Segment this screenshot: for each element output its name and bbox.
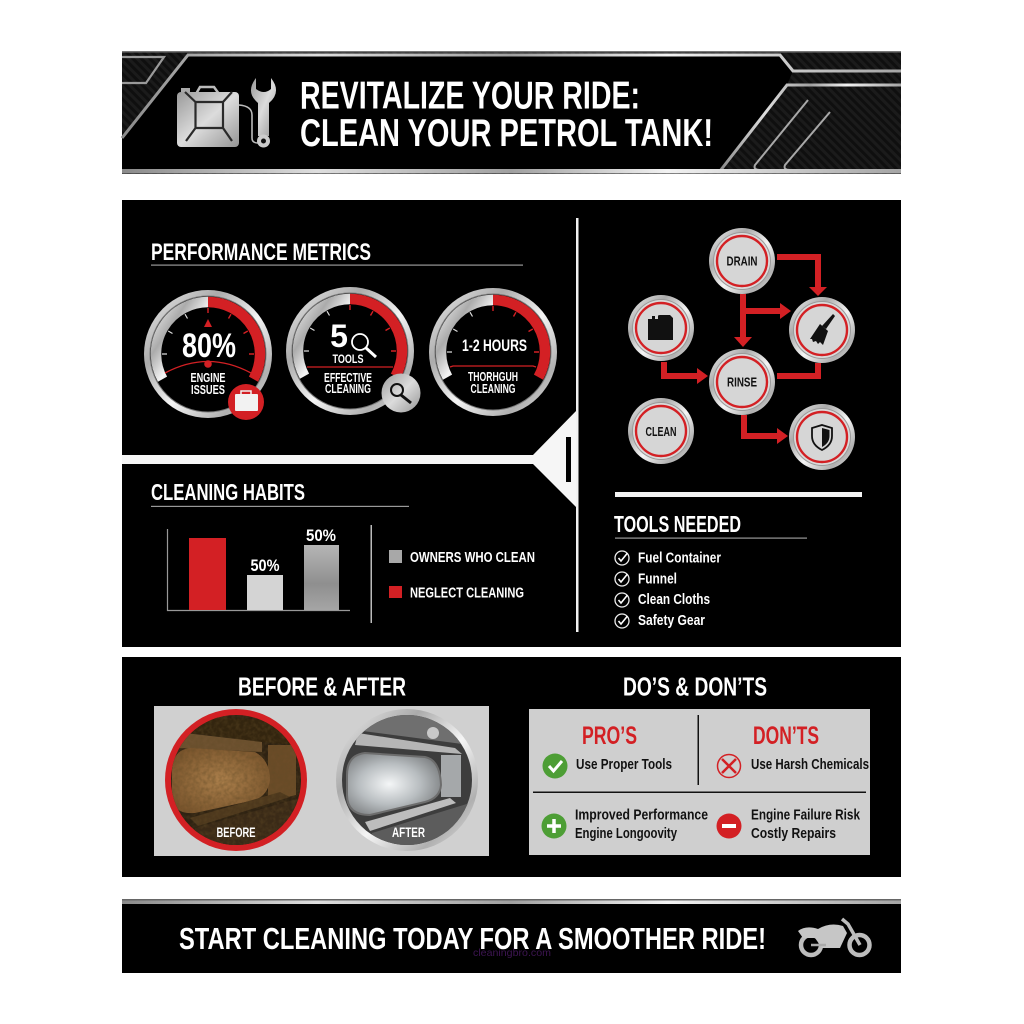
gauge: 80% engine issues: ISSUES — [191, 383, 225, 397]
dos and donts table: Use Proper Tools — [576, 757, 672, 773]
dos and donts table: DON’TS — [753, 722, 819, 750]
legend — [389, 550, 535, 602]
dos and donts table: Costly Repairs — [751, 826, 836, 842]
icon: red minus — [716, 814, 742, 838]
gauge: 5 tools effective cleaning: EFFECTIVE — [324, 371, 372, 385]
step: drain — [709, 228, 775, 294]
header banner — [122, 51, 901, 174]
gauge: 1-2 hours thorough cleaning: CLEANING — [470, 382, 516, 396]
gauge: 80% engine issues: ENGINE — [190, 371, 226, 385]
photo: clean tank — [336, 709, 478, 851]
icon: red cross — [718, 754, 740, 778]
panel: main dark panel — [122, 200, 901, 647]
icon: red toolbox badge — [228, 384, 264, 420]
tools needed list: Funnel — [638, 572, 677, 588]
icon: magnifier badge — [382, 374, 420, 412]
tools needed list: Safety Gear — [638, 613, 705, 629]
infographic canvas — [120, 51, 901, 973]
dos and donts table: Improved Performance — [575, 808, 708, 824]
tools needed list — [614, 511, 807, 629]
gauge: 5 tools effective cleaning — [286, 287, 420, 415]
step: clean: CLEAN — [646, 425, 676, 439]
photo: clean tank: AFTER — [392, 825, 425, 840]
tools needed list: Fuel Container — [638, 550, 721, 566]
flowchart: cleaning steps — [628, 228, 855, 470]
dos and donts table: Use Harsh Chemicals — [751, 757, 869, 773]
dos and donts table: Engine Longoovity — [575, 826, 677, 842]
gauge: 5 tools effective cleaning: TOOLS — [332, 354, 364, 366]
step: drain: DRAIN — [726, 254, 758, 268]
step: clean — [628, 398, 694, 464]
title: REVITALIZE YOUR RIDE: — [300, 74, 640, 118]
divider with arrow notch — [122, 218, 578, 632]
step: rinse: RINSE — [727, 376, 757, 390]
arrows — [661, 254, 827, 444]
icon: green plus — [542, 814, 566, 838]
tools needed list: Clean Cloths — [638, 592, 710, 608]
legend: NEGLECT CLEANING — [410, 586, 524, 602]
gauge: 5 tools effective cleaning: CLEANING — [325, 382, 371, 396]
heading: before and after: BEFORE & AFTER — [238, 672, 406, 702]
footer banner — [122, 899, 901, 973]
icon: jerry can and wrench — [177, 78, 276, 148]
tools needed list: TOOLS NEEDED — [614, 511, 741, 537]
heading: cleaning habits: CLEANING HABITS — [151, 479, 305, 505]
photo: rusty tank — [165, 709, 307, 851]
footer banner: START CLEANING TODAY FOR A SMOOTHER RIDE! — [179, 921, 766, 956]
panel: before and after, dos and donts — [122, 657, 901, 877]
gauge: 1-2 hours thorough cleaning: THORHGUH — [468, 370, 518, 384]
gauge: 5 tools effective cleaning: 5 — [330, 318, 348, 354]
icon: motorcycle — [798, 919, 870, 955]
gauge: 80% engine issues: 80% — [182, 327, 236, 365]
bar chart: cleaning habits: 50% — [306, 526, 336, 545]
step: shield — [789, 404, 855, 470]
dos and donts table: Engine Failure Risk — [751, 808, 861, 824]
step: brush — [789, 297, 855, 363]
bar chart: cleaning habits — [168, 526, 350, 610]
legend: OWNERS WHO CLEAN — [410, 550, 535, 566]
heading: dos and donts: DO’S & DON’TS — [623, 672, 767, 702]
dos and donts table: PRO’S — [582, 722, 637, 750]
gauge: 1-2 hours thorough cleaning: 1-2 HOURS — [462, 336, 527, 355]
photo: rusty tank: BEFORE — [216, 825, 256, 840]
title: CLEAN YOUR PETROL TANK! — [300, 112, 713, 155]
dos and donts table — [529, 709, 870, 855]
heading: performance metrics: PERFORMANCE METRICS — [151, 239, 371, 266]
icon: green check — [542, 754, 568, 778]
gauge: 80% engine issues — [144, 290, 272, 420]
step: rinse — [709, 349, 775, 415]
before and after comparison — [154, 706, 489, 856]
bar chart: cleaning habits: 50% — [250, 556, 280, 575]
footer banner: cleaningbro.com — [473, 947, 551, 959]
step: fuel can — [628, 295, 694, 361]
gauge: 1-2 hours thorough cleaning — [429, 288, 557, 416]
title — [300, 74, 713, 155]
